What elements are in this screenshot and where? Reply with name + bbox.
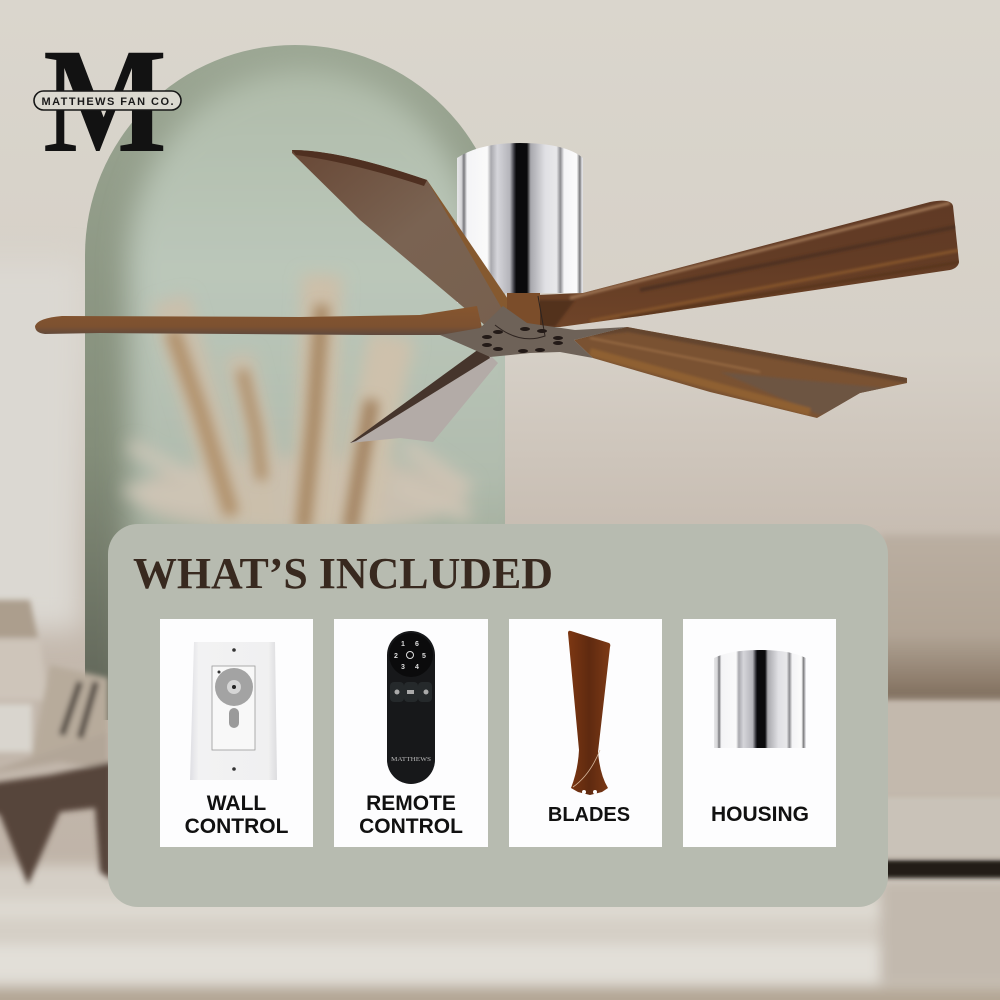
hub centre bbox=[440, 293, 627, 358]
chrome motor housing bbox=[457, 143, 583, 303]
top left blade bbox=[292, 150, 512, 327]
icon: remote control: 2 bbox=[394, 653, 398, 660]
heading: WHAT’S INCLUDED bbox=[133, 549, 553, 598]
icon: remote control: 4 bbox=[415, 664, 419, 671]
label: remote control: CONTROL bbox=[359, 815, 463, 838]
chair and throw blanket, left bbox=[0, 600, 112, 885]
logo monogram M: M bbox=[43, 18, 167, 184]
pampas grass bbox=[125, 275, 470, 533]
lower left blade bbox=[350, 346, 498, 443]
label: housing: HOUSING bbox=[711, 803, 809, 826]
card: blades bbox=[509, 619, 662, 847]
upper right blade bbox=[537, 201, 960, 327]
label: wall control: WALL bbox=[207, 792, 266, 815]
panel: what's included bbox=[108, 524, 888, 907]
label: wall control: CONTROL bbox=[185, 815, 289, 838]
label: blades: BLADES bbox=[548, 804, 630, 826]
left wall light patch bbox=[0, 260, 82, 630]
icon: remote control: 5 bbox=[422, 653, 426, 660]
logo bbox=[34, 18, 181, 184]
icon: remote control bbox=[387, 631, 435, 784]
icon: remote control: 3 bbox=[401, 664, 405, 671]
label: remote control: REMOTE bbox=[366, 792, 456, 815]
card: remote control bbox=[334, 619, 488, 847]
icon: housing bbox=[714, 650, 806, 748]
logo wordmark pill bbox=[34, 91, 181, 110]
lower right blade bbox=[574, 327, 907, 418]
left blade bbox=[35, 306, 483, 335]
sofa, right bbox=[880, 535, 1000, 878]
icon: wall control bbox=[190, 642, 277, 780]
fan bbox=[35, 143, 960, 443]
card: wall control bbox=[160, 619, 313, 847]
icon: remote control: 6 bbox=[415, 641, 419, 648]
icon: remote control: 1 bbox=[401, 641, 405, 648]
icon: blade bbox=[568, 631, 610, 795]
green arch alcove bbox=[80, 40, 530, 740]
logo wordmark pill: MATTHEWS FAN CO. bbox=[42, 96, 174, 108]
icon: remote control: MATTHEWS bbox=[391, 756, 431, 763]
card: housing bbox=[683, 619, 836, 847]
floor bbox=[0, 865, 1000, 1000]
